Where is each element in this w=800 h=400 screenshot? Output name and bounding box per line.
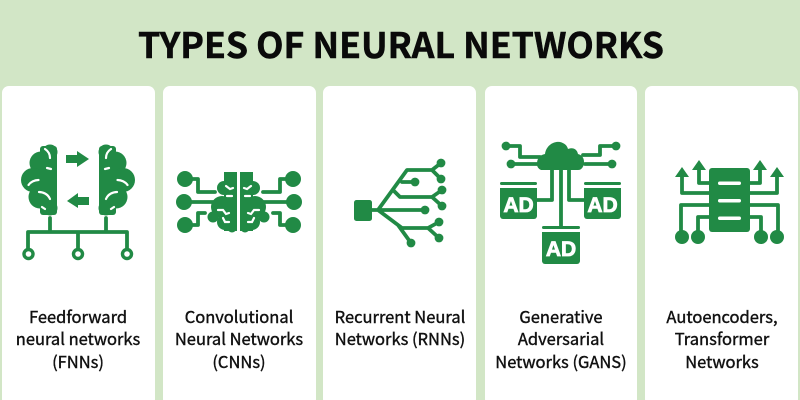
label: Networks (RNNs) [335, 326, 465, 350]
icon: server with arrows and nodes [675, 160, 784, 244]
label: Transformer [675, 326, 770, 350]
label: Convolutional [185, 304, 293, 328]
icon: cloud with ad boxes: AD [546, 238, 576, 261]
title: TYPES OF NEURAL NETWORKS [138, 18, 664, 69]
label: Neural Networks [175, 326, 303, 350]
icon: two brains with arrows [21, 144, 135, 258]
panel: autoencoders, transformer networks [645, 86, 798, 400]
icon: branching tree [354, 159, 446, 247]
label: Networks [685, 349, 759, 373]
label: Recurrent Neural [335, 304, 465, 328]
panel: convolutional neural networks [163, 86, 316, 400]
label: Adversarial [518, 326, 604, 350]
label: (FNNs) [52, 349, 104, 373]
icon: brain with circuit nodes [176, 171, 302, 233]
panel: feedforward neural networks [2, 86, 155, 400]
icon: cloud with ad boxes: AD [503, 194, 534, 217]
label: Generative [519, 304, 603, 328]
panel: generative adversarial networks [485, 86, 637, 400]
label: Autoencoders, [666, 304, 778, 328]
icon: cloud with ad boxes [500, 142, 621, 264]
icon: cloud with ad boxes: AD [587, 194, 618, 217]
label: Networks (GANS) [495, 349, 627, 373]
label: Feedforward [29, 304, 127, 328]
label: (CNNs) [212, 349, 266, 373]
panel: recurrent neural networks [323, 86, 476, 400]
label: neural networks [16, 326, 141, 350]
